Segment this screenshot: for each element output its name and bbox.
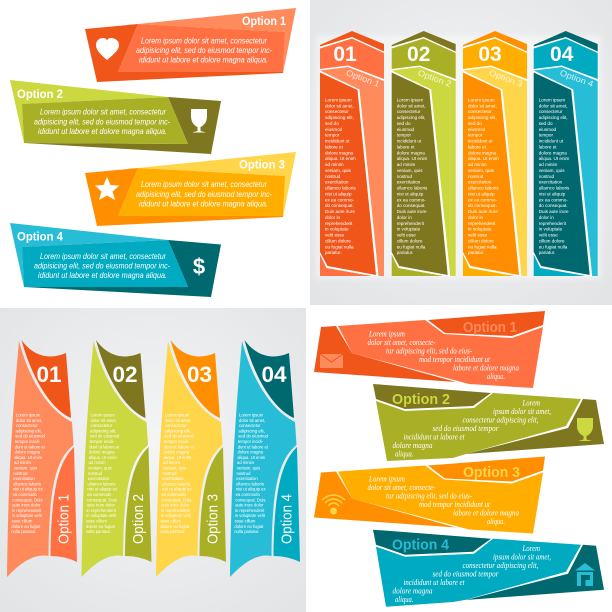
- text: option 3 body: [368, 474, 519, 526]
- text: body column 3: dolore magna: [468, 150, 497, 155]
- text: body column 2: ullamco laboris: [397, 186, 428, 191]
- text: body ribbon 4: dolore eu fugiat: [234, 524, 264, 529]
- text: body ribbon 1: veniam, quis: [14, 466, 37, 470]
- text: body ribbon 3: consectetur: [165, 423, 187, 428]
- text: body column 4: incididunt ut: [539, 139, 564, 144]
- text: body ribbon 4: adipiscing elit,: [238, 428, 265, 433]
- text: option 1 body: ididunt ut labore et dolore magna aliqua.: [139, 54, 268, 64]
- text: body column 3: eu fugiat nulla: [468, 244, 497, 249]
- text: body column 1: sed do: [325, 121, 339, 126]
- text: body column 2: reprehenderit: [397, 221, 425, 226]
- text: body column 2: Lorem ipsum: [397, 98, 423, 102]
- text: body column 1: dolore magna: [325, 150, 354, 155]
- text: body ribbon 2: esse cillum: [86, 518, 107, 524]
- text: option 3 body: [136, 179, 272, 208]
- text: body ribbon 3: tempor incidi-: [164, 439, 190, 444]
- text: body column 4: nisi ut aliquip: [539, 191, 566, 196]
- text: body column 2: aliqua. Ut enim: [397, 156, 428, 161]
- text: option 4 body: dolore magna: [392, 586, 432, 596]
- text: body column 4: eu fugiat nulla: [539, 244, 568, 249]
- text: body ribbon 2: dolor sit amet,: [90, 418, 117, 423]
- text: body column 3: pariatur.: [468, 250, 485, 255]
- text: body ribbon 3: nulla pariatur.: [160, 529, 185, 534]
- text: body column 4: veniam, quis: [539, 168, 565, 173]
- text: body ribbon 4: consectetur: [239, 423, 261, 428]
- text: body ribbon 2: ea commodo: [87, 492, 112, 497]
- text: body column 3: nostrud: [468, 174, 484, 179]
- text: body ribbon 1: consectetur: [16, 423, 38, 428]
- text: body column 2: nisi ut aliquip: [397, 191, 424, 196]
- text: option 2 body: [392, 398, 551, 458]
- text: body column 1: velit esse: [325, 233, 345, 238]
- text: body ribbon 1: aliqua. Ut enim: [14, 455, 43, 460]
- text: body column 2: adipiscing elit,: [397, 115, 426, 120]
- text: body column 4: do consequat.: [539, 203, 568, 208]
- text: body column 2: ex ea commo-: [397, 197, 426, 202]
- text: body column 3: Lorem ipsum: [468, 98, 495, 102]
- text: body column 4: Duis aute irure: [539, 209, 569, 214]
- text: body column 2: in voluptate: [397, 227, 421, 232]
- text: body ribbon 2: Lorem ipsum: [90, 412, 115, 418]
- text: body ribbon 4: ea commodo: [236, 492, 260, 497]
- text: body ribbon 4: nisi ut aliquip ex: [236, 487, 267, 492]
- text: body column 4: reprehenderit: [539, 221, 567, 226]
- text: body ribbon 3: aliqua. Ut enim: [163, 455, 192, 460]
- text: option 3 body: labore et dolore magna: [453, 508, 519, 518]
- ribbon: 01: [7, 340, 77, 577]
- text: body ribbon 2: dolore magna: [89, 450, 115, 455]
- text: body column 1: dolor sit amet,: [325, 103, 354, 108]
- text: option 1 body: tur adipiscing elit, sed do eius-: [386, 346, 472, 356]
- text: body ribbon 1: tempor incidi-: [15, 439, 41, 444]
- text: body column 1: ullamco laboris: [325, 186, 356, 191]
- icon: envelope: [320, 354, 343, 368]
- heading: option 3: Option 3: [463, 464, 520, 481]
- text: body ribbon 2: consequat. Duis: [87, 497, 117, 502]
- text: option 3 body: ididunt ut labore et dolore magna aliqua.: [139, 198, 268, 208]
- text: body column 2: dolore magna: [397, 150, 425, 155]
- text: body column 1: nostrud: [325, 174, 341, 179]
- text: option 1 body: labore et dolore magna: [453, 362, 519, 372]
- label: option 4: Option 4: [559, 67, 595, 89]
- label: option 4: Option 4: [280, 494, 296, 544]
- panel: angular banners bottom-right: [314, 311, 604, 607]
- text: body column 3: consectetur: [468, 109, 492, 114]
- text: body ribbon 4: aliqua. Ut enim: [237, 455, 266, 460]
- text: body column 3: ex ea commo-: [468, 197, 498, 202]
- text: body ribbon 2: tempor incidi-: [90, 439, 115, 444]
- text: body ribbon 1: dunt ut labore et: [15, 444, 46, 449]
- text: option 1 body: Lorem ipsum: [368, 328, 405, 338]
- text: body column 3: nisi ut aliquip: [468, 191, 495, 196]
- text: body column 1: veniam, quis: [325, 168, 351, 173]
- text: body column 3: reprehenderit: [468, 221, 496, 226]
- text: body ribbon 4: consequat. Duis: [235, 497, 265, 502]
- text: option 3 body: mod tempor incididunt ut: [419, 499, 490, 509]
- text: body column 3: aliqua. Ut enim: [468, 156, 499, 161]
- text: option 1 body: Lorem ipsum dolor sit amet, consectetur: [141, 36, 268, 46]
- text: option 2 body: sed do eiusmod tempor: [432, 423, 499, 433]
- text: body ribbon 3: veniam, quis: [163, 466, 186, 470]
- text: body ribbon 2: ullamco laboris: [88, 481, 115, 486]
- label: option 3: Option 3: [488, 67, 524, 89]
- panel: vertical columns top-right: [310, 0, 612, 305]
- text: body column 2: dolor in: [397, 215, 412, 220]
- text: body ribbon 4: Lorem ipsum: [239, 412, 264, 418]
- text: body ribbon 1: dolore eu fugiat: [11, 524, 41, 529]
- text: body ribbon 1: Lorem ipsum: [16, 412, 41, 418]
- heading: option 1: Option 1: [242, 14, 286, 28]
- text: option 2 body: ipsum dolor sit amet,: [493, 406, 551, 416]
- text: body ribbon 3: consequat. Duis: [161, 497, 191, 502]
- text: body column 2: tempor: [397, 133, 411, 138]
- text: body ribbon 4: aute irure dolor: [235, 503, 264, 508]
- text: option 4 body: Lorem ipsum dolor sit amet, consectetur: [40, 251, 167, 261]
- text: body column 3: eiusmod: [468, 127, 486, 132]
- text: body ribbon 2: consectetur: [90, 423, 113, 428]
- text: body column 4: consectetur: [539, 109, 563, 114]
- text: body column 2: eiusmod: [397, 127, 415, 132]
- text: body ribbon 2: nisi ut aliquip ex: [87, 487, 118, 492]
- text: body column 2: ad minim: [397, 162, 416, 167]
- text: body column 2: do consequat.: [397, 203, 426, 208]
- text: body column 3: exercitation: [468, 180, 492, 185]
- text: option 4 body: incididunt ut labore et: [404, 577, 465, 587]
- text: option 2 body: dolore magna: [392, 440, 432, 450]
- text: body ribbon 1: aute irure dolor: [12, 503, 41, 508]
- number: 04: 04: [261, 362, 287, 387]
- text: body column 4: dolor in: [539, 215, 554, 220]
- text: body column 2: sed do: [397, 121, 411, 126]
- text: body column 4: nostrud: [539, 174, 554, 179]
- number: 02: 02: [112, 362, 138, 387]
- label: option 1: Option 1: [56, 494, 72, 544]
- text: option 4 body: aliqua.: [395, 594, 414, 604]
- text: body column 3: dolor in: [468, 215, 484, 220]
- text: option 2 body: Lorem: [522, 398, 540, 408]
- text: body ribbon 3: adipiscing elit,: [164, 428, 191, 433]
- column: 01: [320, 31, 384, 276]
- text: body ribbon 1: adipiscing elit,: [16, 428, 42, 433]
- text: body ribbon 3: in reprehenderit: [161, 508, 191, 513]
- text: option 4 body: [34, 251, 170, 280]
- heading: option 2: Option 2: [17, 87, 63, 101]
- text: body column 1: adipiscing elit,: [325, 115, 354, 120]
- text: body column 1: tempor: [325, 133, 340, 138]
- number: 03: 03: [478, 43, 502, 66]
- ribbon: 02: [82, 340, 152, 577]
- text: body column 2: cillum dolore: [397, 238, 423, 243]
- text: body column 3: labore et: [468, 144, 487, 149]
- text: option 3 body: Lorem ipsum: [368, 474, 405, 484]
- text: body column 3: Duis aute irure: [468, 209, 498, 214]
- text: body ribbon 4: dolor sit amet,: [239, 418, 265, 423]
- text: body column 4: dolor sit amet,: [539, 103, 568, 108]
- text: option 1 body: adipisicing elit, sed do eiusmod tempor inc-: [136, 45, 272, 55]
- text: body column 1: reprehenderit: [325, 221, 353, 226]
- text: option 2 body: incididunt ut labore et: [404, 432, 465, 442]
- text: option 2 body: ididunt ut labore et dolore magna aliqua.: [38, 126, 167, 136]
- text: body column 2: incididunt ut: [397, 139, 422, 144]
- label: option 2: Option 2: [131, 494, 147, 544]
- number: 04: 04: [550, 43, 574, 66]
- text: body column 4: ad minim: [539, 162, 558, 167]
- text: body ribbon 1: ad minim: [14, 460, 31, 465]
- text: body column 3: incididunt ut: [468, 139, 493, 144]
- column: 04: [534, 31, 598, 276]
- text: body ribbon 2: veniam, quis: [88, 466, 112, 470]
- text: body column 4: aliqua. Ut enim: [539, 156, 570, 161]
- text: body ribbon 2: in voluptate velit: [86, 513, 117, 518]
- text: body ribbon 3: aute irure dolor: [161, 503, 190, 508]
- text: body column 3: do consequat.: [468, 203, 497, 208]
- ribbon: 03: [156, 340, 226, 577]
- text: body column 1: dolor in: [325, 215, 341, 220]
- text: body ribbon 4: in reprehenderit: [235, 508, 265, 513]
- ribbon: 04: [230, 340, 300, 577]
- text: body ribbon 3: ea commodo: [162, 492, 186, 497]
- text: body ribbon 4: esse cillum: [235, 518, 256, 524]
- text: option 2 body: adipisicing elit, sed do eiusmod tempor inc-: [34, 116, 170, 126]
- text: option 1 body: mod tempor incididunt ut: [419, 354, 490, 364]
- text: body ribbon 1: sed do eiusmod: [15, 434, 46, 439]
- text: body column 4: pariatur.: [539, 250, 555, 255]
- text: option 2 body: Lorem ipsum dolor sit amet, consectetur: [40, 106, 167, 116]
- text: option 3 body: Lorem ipsum dolor sit amet, consectetur: [141, 179, 268, 189]
- icon: dollar: $: [193, 254, 205, 279]
- icon: wifi: [322, 495, 345, 514]
- text: body column 1: nisi ut aliquip: [325, 191, 352, 196]
- text: body ribbon 4: exercitation: [236, 476, 258, 481]
- text: body ribbon 1: in reprehenderit: [12, 508, 42, 513]
- text: option 4 body: ididunt ut labore et dolore magna aliqua.: [38, 270, 167, 280]
- banner: option 4: [10, 223, 221, 297]
- column: 03: [463, 31, 527, 276]
- text: body column 3: sed do: [468, 121, 482, 126]
- banner: option 4: [373, 530, 604, 607]
- number: 02: 02: [407, 43, 430, 66]
- text: body column 2: exercitation: [397, 180, 421, 185]
- text: body column 4: Lorem ipsum: [539, 98, 565, 102]
- text: body column 3: dolor sit amet,: [468, 103, 497, 108]
- text: body column 3: in voluptate: [468, 227, 492, 232]
- text: body column 1: cillum dolore: [325, 238, 351, 243]
- icon: home: [575, 563, 595, 586]
- heading: option 2: Option 2: [392, 391, 450, 408]
- text: body column 1: do consequat.: [325, 203, 354, 208]
- text: body ribbon 4: tempor incidi-: [238, 439, 264, 444]
- text: body column 2: pariatur.: [397, 250, 413, 255]
- text: body column 4: adipiscing elit,: [539, 115, 568, 120]
- icon: wine glass: [191, 109, 207, 132]
- text: body column 4: dolore magna: [539, 150, 567, 155]
- text: body ribbon 1: consequat. Duis: [12, 497, 42, 502]
- banner: option 2: [373, 384, 604, 461]
- text: body column 2: veniam, quis: [397, 168, 423, 173]
- icon: star: [95, 177, 120, 200]
- text: body ribbon 4: ullamco laboris: [236, 481, 264, 486]
- text: body column 4: in voluptate: [539, 227, 563, 232]
- text: body column 4: tempor: [539, 133, 553, 138]
- text: body ribbon 3: nostrud: [162, 471, 177, 476]
- number: 01: 01: [333, 43, 357, 66]
- text: body ribbon 2: nulla pariatur.: [86, 529, 111, 534]
- banner: option 3: [85, 152, 296, 226]
- text: body column 1: ex ea commo-: [325, 197, 355, 202]
- text: body ribbon 1: nostrud: [14, 471, 28, 476]
- number: 01: 01: [36, 362, 62, 387]
- text: body ribbon 3: dunt ut labore et: [164, 444, 195, 449]
- text: body ribbon 1: nulla pariatur.: [11, 529, 36, 534]
- text: option 4 body: [392, 543, 551, 604]
- text: body column 4: ex ea commo-: [539, 197, 568, 202]
- text: body ribbon 1: ullamco laboris: [13, 481, 41, 486]
- heading: option 4: Option 4: [17, 230, 63, 244]
- text: body column 1: ad minim: [325, 162, 344, 167]
- text: body ribbon 2: nostrud: [88, 471, 103, 476]
- text: body column 2: velit esse: [397, 233, 416, 238]
- text: option 1 body: dolor sit amet, consecte-: [368, 337, 436, 347]
- text: option 3 body: dolor sit amet, consecte-: [368, 482, 436, 492]
- text: body ribbon 2: adipiscing elit,: [90, 428, 116, 433]
- text: body ribbon 2: ad minim: [88, 460, 106, 465]
- text: body ribbon 4: sed do eiusmod: [238, 434, 269, 439]
- text: body ribbon 2: sed do eiusmod: [90, 434, 120, 439]
- text: body ribbon 1: in voluptate velit: [12, 513, 43, 518]
- text: body column 4: sed do: [539, 121, 553, 126]
- text: body ribbon 4: nulla pariatur.: [234, 529, 259, 534]
- text: body column 4: eiusmod: [539, 127, 557, 132]
- text: body column 2: labore et: [397, 144, 415, 149]
- column: 02: [392, 31, 456, 276]
- text: body column 1: aliqua. Ut enim: [325, 156, 356, 161]
- text: body ribbon 2: in reprehenderit: [86, 508, 117, 513]
- banner: option 2: [10, 80, 221, 154]
- text: body ribbon 1: esse cillum: [12, 518, 33, 524]
- text: body ribbon 3: exercitation: [162, 476, 184, 481]
- text: body ribbon 4: veniam, quis: [237, 466, 260, 470]
- text: body ribbon 3: nisi ut aliquip ex: [162, 487, 193, 492]
- text: body ribbon 1: dolor sit amet,: [16, 418, 42, 423]
- text: body column 3: velit esse: [468, 233, 488, 238]
- banner: option 1: [85, 8, 296, 82]
- text: option 4 body: Lorem: [522, 543, 540, 553]
- text: body column 1: Duis aute irure: [325, 209, 355, 214]
- text: body column 2: eu fugiat nulla: [397, 244, 426, 249]
- text: body ribbon 2: aliqua. Ut enim: [89, 455, 117, 460]
- heading: option 4: Option 4: [392, 536, 450, 554]
- text: body ribbon 3: in voluptate velit: [161, 513, 192, 518]
- text: body ribbon 4: dunt ut labore et: [238, 444, 269, 449]
- text: option 4 body: sed do eiusmod tempor: [432, 568, 499, 578]
- text: body column 2: dolor sit amet,: [397, 103, 426, 108]
- text: body column 1: in voluptate: [325, 227, 349, 232]
- text: body ribbon 3: sed do eiusmod: [164, 434, 195, 439]
- text: option 1 body: [368, 328, 519, 381]
- icon: heart: [96, 38, 119, 60]
- text: body ribbon 3: dolore magna: [164, 450, 190, 455]
- text: body column 1: incididunt ut: [325, 139, 350, 144]
- banner: option 3: [314, 456, 545, 534]
- text: body ribbon 3: dolor sit amet,: [165, 418, 191, 423]
- text: body column 1: eiusmod: [325, 127, 343, 132]
- text: option 3 body: aliqua.: [487, 516, 505, 526]
- text: body ribbon 4: nostrud: [236, 471, 251, 476]
- text: body column 3: ullamco laboris: [468, 186, 499, 191]
- text: option 1 body: [136, 36, 272, 64]
- text: body column 1: Lorem ipsum: [325, 98, 352, 102]
- text: body ribbon 3: Lorem ipsum: [165, 412, 190, 418]
- text: body ribbon 2: exercitation: [88, 476, 110, 481]
- text: body column 4: cillum dolore: [539, 238, 565, 243]
- text: option 2 body: consectetur adipiscing elit,: [462, 414, 538, 424]
- text: body column 2: consectetur: [397, 109, 421, 114]
- text: option 2 body: aliqua.: [395, 448, 414, 458]
- text: body column 4: velit esse: [539, 233, 558, 238]
- icon: wine glass: [577, 418, 593, 441]
- text: body column 1: pariatur.: [325, 250, 342, 255]
- text: option 4 body: consectetur adipiscing elit,: [462, 560, 538, 570]
- text: body column 3: cillum dolore: [468, 238, 494, 243]
- text: body ribbon 2: aute irure dolor: [87, 503, 115, 508]
- banner: option 1: [314, 311, 545, 388]
- text: body column 1: exercitation: [325, 180, 349, 185]
- text: body ribbon 3: ad minim: [163, 460, 180, 465]
- panel: curved ribbons bottom-left: [0, 308, 306, 612]
- text: body column 3: ad minim: [468, 162, 487, 167]
- text: body column 3: tempor: [468, 133, 483, 138]
- text: body column 2: Duis aute irure: [397, 209, 427, 214]
- text: body column 3: veniam, quis: [468, 168, 494, 173]
- text: body ribbon 2: dolore eu fugiat: [86, 524, 116, 529]
- text: body ribbon 4: ad minim: [237, 460, 254, 465]
- text: body ribbon 3: dolore eu fugiat: [160, 524, 190, 529]
- text: body ribbon 1: exercitation: [13, 476, 35, 481]
- label: option 2: Option 2: [417, 67, 453, 89]
- number: 03: 03: [187, 362, 212, 387]
- heading: option 1: Option 1: [463, 319, 517, 336]
- text: body column 1: labore et: [325, 144, 344, 149]
- text: body column 4: exercitation: [539, 180, 563, 185]
- text: body ribbon 4: dolore magna: [238, 450, 264, 455]
- text: option 4 body: ipsum dolor sit amet,: [493, 552, 551, 562]
- text: option 3 body: adipisicing elit, sed do eiusmod tempor inc-: [136, 189, 272, 199]
- text: body column 2: nostrud: [397, 174, 412, 179]
- text: body column 1: consectetur: [325, 109, 349, 114]
- text: body ribbon 3: ullamco laboris: [162, 481, 190, 486]
- text: body ribbon 1: dolore magna: [14, 450, 41, 455]
- label: option 3: Option 3: [206, 494, 222, 544]
- text: body column 4: ullamco laboris: [539, 186, 570, 191]
- heading: option 3: Option 3: [239, 158, 285, 172]
- panel: horizontal banners top-left: [10, 8, 296, 297]
- label: option 1: Option 1: [345, 67, 381, 89]
- text: option 3 body: tur adipiscing elit, sed do eius-: [386, 490, 472, 500]
- text: body column 3: adipiscing elit,: [468, 115, 497, 120]
- text: body ribbon 4: in voluptate velit: [235, 513, 266, 518]
- text: option 4 body: adipisicing elit, sed do eiusmod tempor inc-: [34, 260, 170, 270]
- text: body ribbon 1: ea commodo: [13, 492, 37, 497]
- text: body ribbon 2: dunt ut labore et: [89, 444, 120, 449]
- text: option 2 body: [34, 106, 170, 136]
- text: option 1 body: aliqua.: [487, 371, 505, 381]
- text: body ribbon 3: esse cillum: [161, 518, 182, 524]
- text: body column 4: labore et: [539, 144, 557, 149]
- text: body ribbon 1: nisi ut aliquip ex: [13, 487, 44, 492]
- text: body column 1: eu fugiat nulla: [325, 244, 354, 249]
